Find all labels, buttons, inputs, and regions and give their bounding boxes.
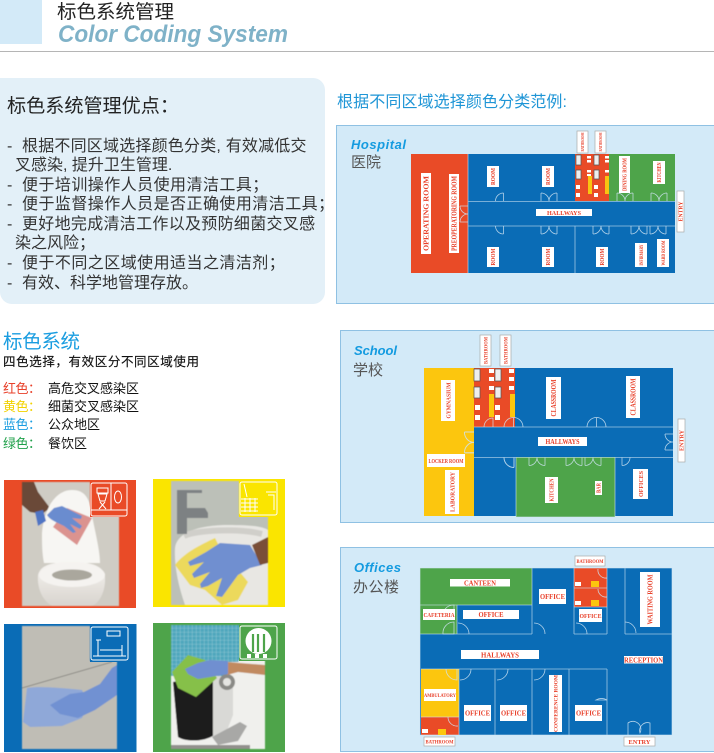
hospital doors [460, 193, 667, 234]
school room labels: LOCKER ROOM [428, 459, 464, 465]
school room labels: CLASSROOM [629, 378, 637, 416]
hospital room labels: ROOM [490, 248, 497, 266]
advantages list: 便于监督操作人员是否正确使用清洁工具； [22, 195, 335, 213]
offices room labels: OFFICE [478, 611, 504, 619]
offices room labels: OFFICE [576, 710, 601, 718]
school room labels: KITCHEN [550, 478, 556, 502]
legend row: red: 红色： [3, 381, 41, 396]
hospital room labels: ROOM [545, 248, 552, 266]
icon: toilet [90, 481, 128, 517]
advantages list: - [7, 196, 13, 213]
heading: color examples by area: 根据不同区域选择颜色分类范例: [337, 93, 567, 111]
hospital room labels: ENTRY [678, 201, 685, 222]
hospital room labels [421, 131, 685, 267]
panel: offices [340, 548, 714, 752]
school room labels: LABORATORY [449, 472, 456, 512]
legend row: yellow: 细菌交叉感染区 [48, 399, 139, 414]
hospital room labels: ROOM [599, 248, 606, 266]
photo card: blue floor [4, 624, 136, 752]
advantages list: 染之风险； [15, 234, 95, 252]
offices room labels: HALLWAYS [481, 652, 519, 660]
hospital room labels: OPERATING ROOM [422, 176, 430, 251]
advantages list: 更好地完成清洁工作以及预防细菌交叉感 [22, 215, 315, 233]
offices room labels: BATHROOM [426, 740, 454, 746]
advantages list: - [7, 177, 13, 194]
hospital room labels: WARD ROOM [661, 240, 667, 266]
legend row: blue: 蓝色： [3, 417, 41, 432]
panel: hospital [336, 126, 714, 304]
photo card: yellow sink [153, 479, 285, 607]
legend row: yellow: 黄色： [3, 399, 41, 414]
school room labels: GYMNASIUM [445, 382, 452, 418]
school room labels [427, 335, 686, 514]
floor plan: hospital [411, 131, 685, 273]
legend heading: 标色系统 [3, 331, 80, 353]
panel: school [340, 330, 714, 522]
offices room labels: WAITING ROOM [646, 574, 654, 624]
hospital room labels: BATHROOM [598, 132, 603, 152]
advantages heading: 标色系统管理优点： [7, 95, 179, 117]
offices room labels: AMBULATORY [424, 693, 456, 699]
icon: bed [90, 626, 129, 662]
panel: advantages [0, 78, 335, 304]
school room labels: BAR [596, 482, 602, 493]
hospital room labels: KITCHEN [657, 162, 663, 182]
hospital title: Hospital [351, 137, 406, 152]
offices room labels: BATHROOM [576, 559, 604, 565]
photo card: red toilet [4, 480, 136, 608]
legend row: green [3, 436, 87, 451]
header [0, 0, 714, 52]
legend row: red: 高危交叉感染区 [48, 381, 139, 396]
hospital room labels: DINING ROOM [622, 158, 628, 191]
advantages list: - [7, 275, 12, 292]
offices room labels [423, 556, 663, 746]
school room labels: ENTRY [679, 430, 686, 451]
school room labels: OFFICES [638, 471, 645, 497]
advantages list: 有效、科学地管理存放。 [22, 274, 198, 292]
school Chinese label: 学校 [353, 362, 383, 379]
color system legend [3, 331, 199, 451]
offices room labels: CAFETERIA [424, 613, 455, 619]
school room labels: HALLWAYS [546, 438, 580, 446]
school restroom fixtures [474, 369, 515, 420]
legend row: blue: 公众地区 [48, 417, 100, 432]
school room labels: BATHROOM [504, 337, 509, 364]
advantages list: - [7, 255, 13, 272]
hospital room labels: BATHROOM [580, 132, 585, 152]
icon: sink [239, 481, 277, 517]
offices room labels: CONFERENCE ROOM [553, 674, 559, 732]
offices room labels: OFFICE [540, 593, 565, 601]
legend row: green: 餐饮区 [48, 436, 87, 451]
hospital Chinese label: 医院 [351, 153, 381, 171]
advantages list: - [7, 216, 13, 233]
floor plan: offices [420, 556, 672, 746]
hospital room labels: PREOPERATORING ROOM [450, 176, 458, 251]
offices room labels: CANTEEN [464, 580, 496, 588]
legend subtitle: 四色选择，有效区分不同区域使用 [3, 354, 199, 369]
offices room labels: RECEPTION [624, 656, 663, 664]
icon: cutlery [239, 625, 278, 661]
offices room labels: OFFICE [501, 710, 526, 718]
offices room labels: ENTRY [628, 739, 651, 746]
school doors [464, 418, 673, 468]
school title: School [354, 343, 397, 358]
hospital room labels: HALLWAYS [547, 210, 581, 217]
floor plan: school [424, 335, 686, 517]
advantages list: 便于不同之区域使用适当之清洁剂； [22, 254, 285, 272]
legend row: green: 绿色： [3, 436, 41, 451]
title: English: Color Coding System [58, 21, 288, 48]
hospital room labels: INFIRMARY [639, 244, 645, 266]
advantages list: - [7, 138, 13, 155]
offices room labels: OFFICE [580, 614, 602, 620]
header accent block [0, 0, 42, 44]
school room labels: BATHROOM [484, 337, 489, 364]
legend row: blue [3, 417, 100, 432]
school room labels: CLASSROOM [550, 379, 558, 416]
offices title: Offices [354, 560, 401, 575]
advantages list: 便于培训操作人员使用清洁工具； [22, 176, 269, 194]
advantages list [7, 137, 335, 292]
offices room labels: OFFICE [465, 710, 490, 718]
hospital room labels: ROOM [490, 168, 497, 185]
legend row: red [3, 381, 139, 396]
hospital restroom fixtures [576, 155, 609, 197]
legend row: yellow [3, 399, 139, 414]
offices restroom fixtures [422, 581, 599, 735]
title: Chinese: 标色系统管理 [57, 1, 174, 23]
offices doors [443, 569, 650, 735]
photo card: green coffee machine [153, 623, 285, 752]
hospital room labels: ROOM [545, 168, 552, 185]
advantages list: 根据不同区域选择颜色分类, 有效减低交 [22, 137, 307, 155]
offices Chinese label: 办公楼 [353, 579, 399, 596]
advantages list: 叉感染, 提升卫生管理. [15, 156, 172, 174]
